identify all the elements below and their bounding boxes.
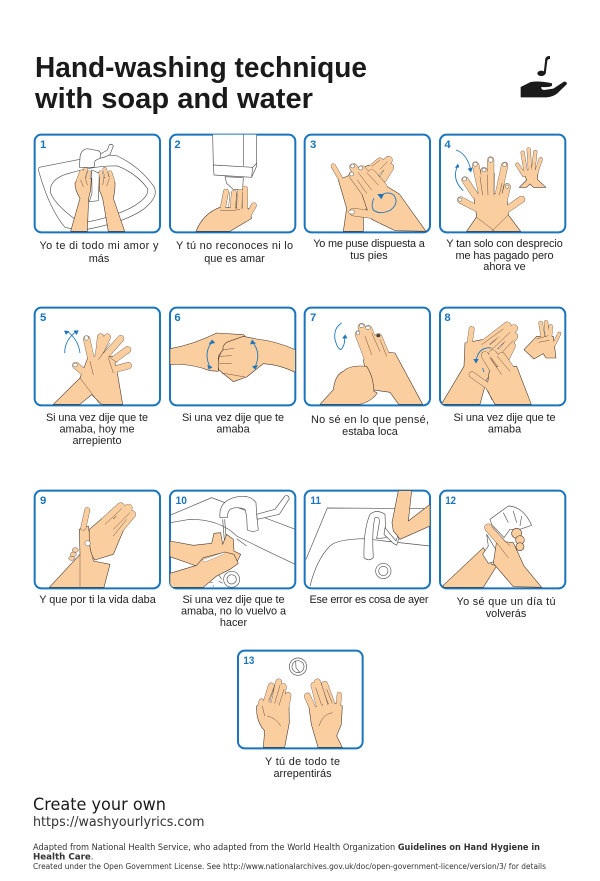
panel: step 2 soap bbox=[170, 133, 295, 232]
caption 13: Y tú de todo te bbox=[265, 756, 340, 768]
step number: 11 bbox=[310, 495, 321, 507]
caption 13: arrepentirás bbox=[273, 768, 332, 780]
caption 1: Yo te di todo mi amor y bbox=[40, 240, 159, 252]
frame bbox=[35, 308, 160, 405]
footer credits: Created under the Open Government License. See http://www.nationalarchives.gov.uk/doc/open-government-licence/version/3/ for details bbox=[33, 862, 546, 871]
illustration: towel and hands bbox=[443, 506, 542, 587]
step number: 10 bbox=[176, 495, 187, 507]
illustration: fingertips in palm bbox=[441, 322, 559, 404]
panel: step 11 turn off tap bbox=[305, 491, 430, 588]
frame bbox=[35, 491, 160, 588]
call to action: https://washyourlyrics.com bbox=[33, 814, 204, 830]
step number: 3 bbox=[310, 139, 316, 151]
panel: step 10 rinse bbox=[170, 491, 295, 588]
illustration: rubbing palms bbox=[333, 160, 426, 231]
caption 8: Si una vez dije que te bbox=[454, 412, 556, 424]
illustration: elbow closing tap bbox=[306, 491, 430, 586]
illustration: dispenser and hand bbox=[196, 133, 257, 231]
frame bbox=[440, 491, 565, 588]
caption 2: Y tú no reconoces ni lo bbox=[176, 240, 293, 252]
footer credits bbox=[33, 843, 546, 871]
panel: step 4 back of hands bbox=[440, 135, 565, 232]
step number: 5 bbox=[40, 312, 46, 324]
icon: music note over hand bbox=[521, 56, 567, 97]
caption 6: amaba bbox=[216, 424, 251, 436]
caption 3: tus pies bbox=[350, 250, 388, 262]
call to action: Create your own bbox=[33, 795, 166, 814]
caption 5: arrepiento bbox=[72, 435, 122, 447]
panel: step 1 wet hands bbox=[35, 135, 160, 232]
caption 5: amaba, hoy me bbox=[59, 424, 135, 436]
panel: step 8 fingertips bbox=[440, 308, 565, 405]
step number: 13 bbox=[243, 655, 254, 667]
caption 7: No sé en lo que pensé, bbox=[311, 414, 429, 426]
illustration: clasped fists bbox=[170, 333, 295, 382]
panel: step 6 back of fingers bbox=[170, 308, 295, 405]
caption 4: Y tan solo con desprecio bbox=[446, 238, 563, 250]
footer credits: Adapted from National Health Service, who adapted from the World Health Organization Guidelines on Hand Hygiene in bbox=[33, 843, 540, 853]
frame bbox=[305, 135, 430, 232]
step number: 8 bbox=[444, 312, 451, 324]
step number: 9 bbox=[40, 495, 46, 507]
illustration: rinsing under tap bbox=[170, 496, 295, 587]
caption 2: que es amar bbox=[204, 253, 265, 265]
caption 3: Yo me puse dispuesta a bbox=[313, 238, 426, 250]
step number: 6 bbox=[174, 312, 181, 324]
caption 5: Si una vez dije que te bbox=[46, 412, 148, 424]
step number: 4 bbox=[444, 139, 451, 151]
step number: 12 bbox=[445, 495, 456, 507]
footer credits: Health Care. bbox=[33, 852, 94, 862]
frame bbox=[305, 308, 430, 405]
caption 10: amaba, no lo vuelvo a bbox=[181, 606, 287, 618]
panel: step 5 fingers interlaced bbox=[35, 308, 160, 405]
caption 1: más bbox=[89, 253, 110, 265]
caption 10: Si una vez dije que te bbox=[182, 594, 284, 606]
frame bbox=[238, 651, 363, 748]
frame bbox=[170, 135, 295, 232]
frame bbox=[440, 135, 565, 232]
title bbox=[34, 52, 367, 115]
caption 7: estaba loca bbox=[342, 426, 399, 438]
step number: 2 bbox=[174, 139, 181, 151]
illustration: interlocked fingers bbox=[53, 330, 128, 404]
illustration: fist around thumb bbox=[320, 323, 423, 404]
step number: 7 bbox=[310, 312, 316, 324]
step number: 1 bbox=[40, 139, 46, 151]
frame bbox=[440, 308, 565, 405]
panel: step 3 palm to palm bbox=[305, 135, 430, 232]
caption 9: Y que por ti la vida daba bbox=[39, 594, 157, 606]
frame bbox=[170, 491, 295, 588]
panel: step 7 thumbs bbox=[305, 308, 430, 405]
caption 12: volverás bbox=[486, 608, 527, 620]
illustration: hand grasping wrist bbox=[49, 507, 132, 587]
call to action bbox=[33, 795, 204, 830]
caption 12: Yo sé que un día tú bbox=[456, 596, 556, 608]
frame bbox=[305, 491, 430, 588]
caption 11: Ese error es cosa de ayer bbox=[310, 594, 429, 606]
caption 6: Si una vez dije que te bbox=[182, 412, 284, 424]
illustration: interlaced fingers bbox=[455, 149, 546, 231]
caption 4: ahora ve bbox=[483, 261, 526, 273]
title: with soap and water bbox=[34, 83, 313, 115]
caption 4: me has pagado pero bbox=[456, 250, 554, 262]
panel: step 12 dry with towel bbox=[440, 491, 565, 588]
panel: step 13 clean hands bbox=[238, 651, 363, 748]
frame bbox=[170, 308, 295, 405]
title: Hand-washing technique bbox=[35, 52, 367, 84]
illustration: sink and hands bbox=[39, 144, 155, 231]
illustration: drain and open hands bbox=[257, 658, 342, 747]
frame bbox=[35, 135, 160, 232]
caption 8: amaba bbox=[488, 424, 522, 436]
panel: step 9 wrists bbox=[35, 491, 160, 588]
caption 10: hacer bbox=[220, 617, 247, 629]
